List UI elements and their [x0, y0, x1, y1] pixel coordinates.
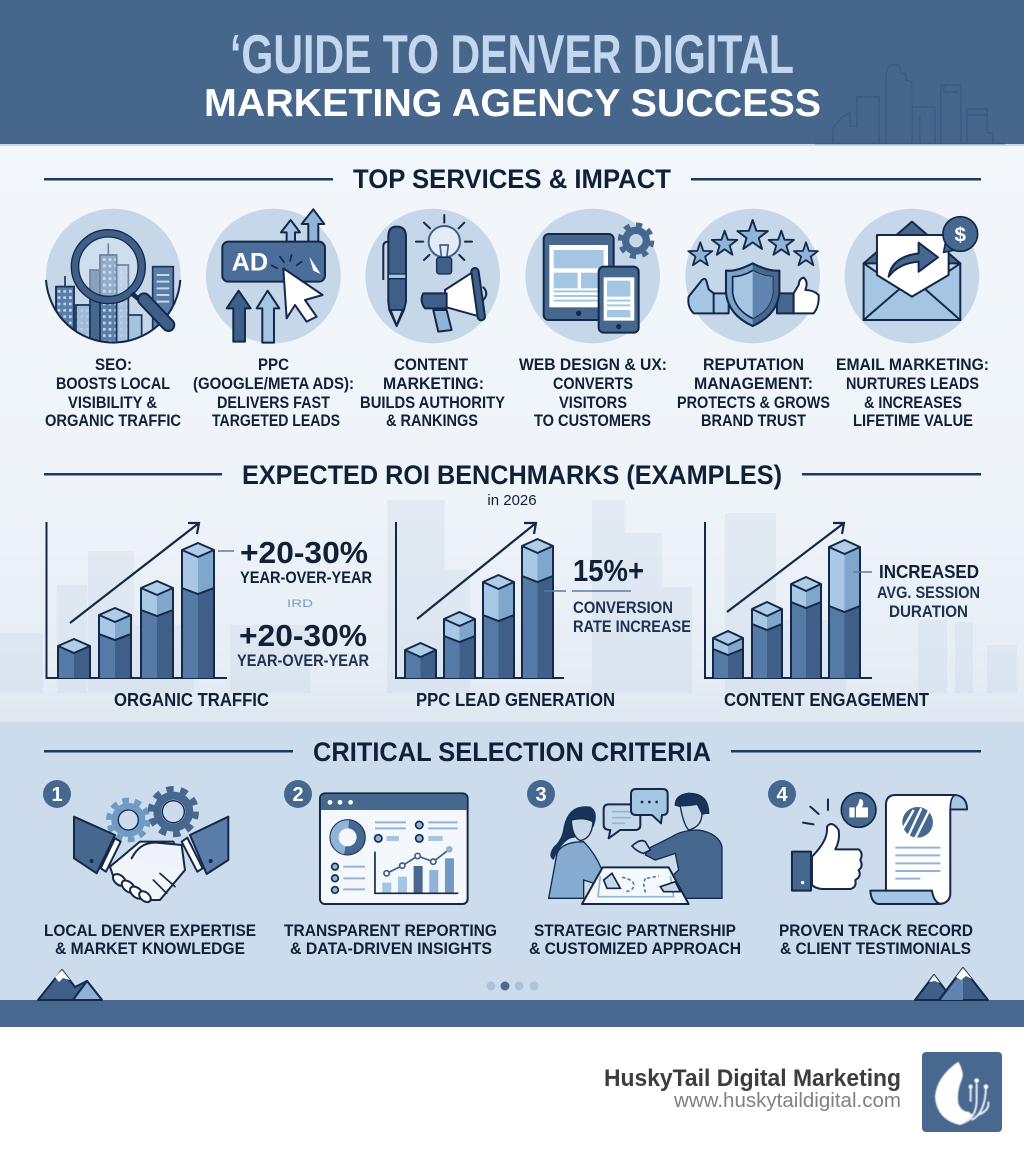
- icon: analytics dashboard: [320, 793, 468, 904]
- label: BUILDS AUTHORITY: [360, 394, 505, 412]
- icon: handshake and gears: [74, 789, 228, 904]
- icon: right mountains: [915, 968, 988, 1000]
- chart: content engagement: [705, 522, 980, 710]
- label: & RANKINGS: [386, 412, 478, 430]
- label: CONTENT: [394, 356, 468, 374]
- label: [193, 356, 354, 430]
- callout: first stat: +20-30%: [240, 535, 368, 570]
- header banner: [0, 0, 1024, 146]
- icon: two people at a table: [549, 789, 722, 904]
- header skyline outline: [815, 65, 1005, 144]
- badge 2: 2: [292, 784, 304, 806]
- callout: stat: [877, 562, 980, 621]
- label: REPUTATION: [703, 356, 804, 374]
- label: MARKETING:: [383, 375, 484, 393]
- icon: envelope with arrow and dollar bubble: [845, 209, 979, 343]
- callout: stat: 15%+: [573, 553, 644, 588]
- label: & MARKET KNOWLEDGE: [55, 939, 245, 958]
- callout: first stat: YEAR-OVER-YEAR: [240, 569, 372, 587]
- label: LOCAL DENVER EXPERTISE: [44, 921, 256, 940]
- label: [529, 921, 741, 958]
- chart title: PPC LEAD GENERATION: [416, 690, 615, 710]
- icon: shield, stars and thumbs: [685, 209, 820, 343]
- heading: selection criteria: CRITICAL SELECTION CRITERIA: [313, 737, 711, 767]
- footer bar: [0, 1000, 1024, 1027]
- label: MANAGEMENT:: [694, 375, 813, 393]
- logo: [922, 1052, 1002, 1132]
- chart title: ORGANIC TRAFFIC: [114, 690, 269, 710]
- service: content marketing: [360, 209, 505, 430]
- label: [284, 921, 497, 958]
- subheading year: in 2026: [487, 492, 537, 509]
- label: BRAND TRUST: [701, 412, 806, 430]
- background skyline: [0, 500, 1017, 693]
- label: VISITORS: [559, 394, 627, 412]
- label: EMAIL MARKETING:: [836, 356, 989, 374]
- label: [677, 356, 830, 430]
- label: LIFETIME VALUE: [853, 412, 973, 430]
- title line 1: ‘GUIDE TO DENVER DIGITAL: [230, 23, 794, 85]
- callout: stat: [573, 553, 691, 636]
- service: PPC: [193, 209, 354, 430]
- icon: city under magnifying glass: [46, 209, 181, 347]
- label: [836, 356, 989, 430]
- panel: selection criteria: [0, 722, 1024, 1000]
- callout: second stat: +20-30%: [239, 618, 367, 653]
- icon: pen, bulb and megaphone: [365, 209, 500, 343]
- label: [519, 356, 667, 430]
- badge 4: [768, 780, 796, 808]
- label: WEB DESIGN & UX:: [519, 356, 667, 374]
- icon: ad banner and cursor: [206, 209, 341, 343]
- chart: PPC lead generation: [396, 522, 691, 710]
- label: CONVERTS: [553, 375, 633, 393]
- badge 3: 3: [535, 784, 547, 806]
- callout: stat: RATE INCREASE: [573, 618, 691, 636]
- callout: stat: DURATION: [889, 603, 968, 621]
- label: & INCREASES: [864, 394, 962, 412]
- label: & DATA-DRIVEN INSIGHTS: [290, 939, 492, 958]
- arrow: [727, 523, 844, 612]
- label: ORGANIC TRAFFIC: [45, 412, 181, 430]
- label: VISIBILITY &: [68, 394, 157, 412]
- label: PPC: [258, 356, 289, 374]
- icon: left mountains: [38, 970, 102, 1000]
- label: [45, 356, 181, 430]
- callout: stat: CONVERSION: [573, 599, 673, 617]
- chart title: CONTENT ENGAGEMENT: [724, 690, 929, 710]
- icon: ad banner and cursor: AD: [232, 249, 268, 277]
- label: STRATEGIC PARTNERSHIP: [534, 921, 736, 940]
- heading: top services: TOP SERVICES & IMPACT: [353, 164, 671, 194]
- callout: stat: INCREASED: [879, 562, 979, 582]
- label: [779, 921, 973, 958]
- arrow: [417, 523, 536, 619]
- service: email marketing: [836, 209, 989, 430]
- footer branding: [0, 1027, 1024, 1154]
- label: TRANSPARENT REPORTING: [284, 921, 497, 940]
- label: & CLIENT TESTIMONIALS: [780, 939, 971, 958]
- label: PROVEN TRACK RECORD: [779, 921, 973, 940]
- callout: second stat: [237, 618, 369, 670]
- criterion 1: local expertise: [43, 780, 256, 958]
- label: BOOSTS LOCAL: [56, 375, 170, 393]
- label: [360, 356, 505, 430]
- badge 1: [43, 780, 71, 808]
- label: NURTURES LEADS: [846, 375, 979, 393]
- service: SEO: [45, 209, 181, 430]
- service: reputation management: [677, 209, 830, 430]
- heading: ROI benchmarks: EXPECTED ROI BENCHMARKS (EXAMPLES): [242, 460, 782, 490]
- company url: www.huskytaildigital.com: [673, 1090, 901, 1112]
- callout: stat: AVG. SESSION: [877, 584, 980, 602]
- small mark: IRD: [287, 598, 313, 610]
- callout: first stat: [240, 535, 372, 587]
- icon: tablet, phone and gear: [525, 209, 660, 343]
- criterion 3: strategic partnership: [527, 780, 741, 958]
- icon: thumbs up and testimonial scroll: [792, 793, 967, 904]
- badge 3: [527, 780, 555, 808]
- callout: second stat: YEAR-OVER-YEAR: [237, 652, 369, 670]
- label: TO CUSTOMERS: [534, 412, 651, 430]
- label: & CUSTOMIZED APPROACH: [529, 939, 741, 958]
- page background: [0, 145, 1024, 722]
- company name: HuskyTail Digital Marketing: [604, 1065, 901, 1092]
- label: [44, 921, 256, 958]
- label: (GOOGLE/META ADS):: [193, 375, 354, 393]
- label: SEO:: [95, 356, 132, 374]
- arrow: [70, 523, 199, 623]
- label: DELIVERS FAST: [217, 394, 330, 412]
- service: web design: [519, 209, 667, 430]
- badge 2: [284, 780, 312, 808]
- pagination dots: [486, 982, 538, 990]
- icon: envelope with arrow and dollar bubble: $: [955, 223, 967, 246]
- badge 1: 1: [51, 784, 63, 806]
- criterion 2: transparent reporting: [284, 780, 497, 958]
- label: PROTECTS & GROWS: [677, 394, 830, 412]
- badge 4: 4: [776, 784, 788, 806]
- title line 2: MARKETING AGENCY SUCCESS: [204, 82, 821, 125]
- label: TARGETED LEADS: [212, 412, 340, 430]
- chart: organic traffic: [46, 522, 372, 710]
- heading: ROI benchmarks: [44, 460, 981, 509]
- criterion 4: proven track record: [768, 780, 973, 958]
